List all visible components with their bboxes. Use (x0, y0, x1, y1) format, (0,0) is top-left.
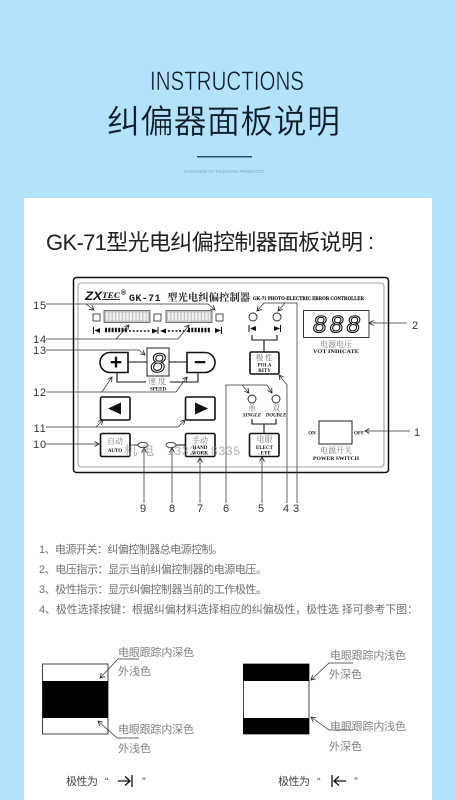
LED indicator squares (93, 314, 223, 321)
eye mode labels: SINGLE (243, 414, 262, 418)
callout numbers: 10 (33, 439, 47, 451)
brand logo: ZXTEC: TEC (102, 290, 120, 300)
power switch label: 电源开关 (320, 445, 352, 455)
speed label: SPEED (150, 388, 166, 392)
brand logo: ZXTEC: ZX (84, 289, 103, 303)
manual button: HAND (193, 446, 208, 451)
callout numbers: 8 (169, 503, 175, 515)
right diagram labels: 外深色 (329, 739, 362, 753)
polarity button: RITY (258, 369, 271, 374)
minus button (187, 351, 215, 374)
watermark: 1332 (167, 444, 196, 458)
panel title English: GK-71 PHOTO-ELECTRIC ERROR CONTROLLER (253, 296, 365, 302)
callout numbers: 6 (223, 503, 229, 515)
polarity direction symbols (248, 325, 281, 332)
eye lamps (248, 395, 280, 403)
LED bar left (104, 310, 150, 322)
eye bracket (252, 419, 276, 433)
deviation meter row (93, 327, 222, 334)
manual button: 手动 (192, 435, 208, 445)
panel frame (74, 278, 388, 472)
power switch label: POWER SWITCH (313, 457, 359, 462)
voltage label: 电源电压 (320, 339, 352, 349)
left diagram labels (118, 645, 194, 755)
power switch (308, 421, 364, 444)
voltage display (304, 310, 369, 338)
title: Chinese heading: 纠偏器面板说明 (107, 103, 340, 140)
callout numbers: 15 (33, 300, 47, 312)
callout numbers: 9 (140, 503, 146, 515)
left polarity caption: 极性为 (66, 774, 98, 788)
manual button: WORK (192, 452, 208, 456)
polarity button: 极性 (256, 352, 274, 362)
polarity button: POLA (258, 364, 272, 368)
eye mode labels: DOUBLE (265, 414, 287, 418)
left diagram labels: 电眼跟踪内深色 (118, 645, 194, 659)
instruction list (39, 542, 418, 616)
left diagram leaders (98, 659, 139, 738)
speed label: 速度 (148, 376, 168, 386)
left polarity caption (66, 774, 146, 788)
watermark: 8335 (211, 444, 240, 458)
polarity button (250, 352, 279, 374)
speed connector lines (117, 362, 198, 382)
voltage label (313, 339, 360, 355)
power switch: OFF (354, 432, 364, 436)
watermark: 机电 (124, 443, 154, 458)
right arrow button (186, 397, 215, 420)
title underline (197, 156, 252, 158)
callout numbers: 5 (258, 503, 264, 515)
plus button: + (110, 351, 122, 374)
speed display: 8 (150, 348, 166, 378)
callout numbers: 3 (293, 503, 299, 515)
electric eye button: . EYE (258, 452, 272, 456)
brand logo: ZXTEC (84, 289, 127, 303)
speed display (147, 348, 169, 378)
callout numbers: 2 (412, 320, 418, 332)
callout numbers: 7 (197, 503, 203, 515)
card heading: GK-71型光电纠偏控制器面板说明 (46, 230, 363, 255)
eye mode labels: 单 (248, 403, 256, 413)
callout numbers: 4 (283, 503, 289, 515)
callout leaders (46, 303, 410, 503)
card heading: : (368, 229, 374, 254)
left diagram labels: 外浅色 (118, 741, 151, 755)
callout numbers: 11 (33, 423, 47, 435)
diagram: dark centre stripe (42, 664, 108, 734)
callout numbers (33, 300, 420, 515)
electric eye button: 电眼 (256, 434, 272, 444)
item 2: 2、电压指示：显示当前纠偏控制器的电源电压。 (39, 562, 267, 576)
right polarity caption: 极性为 (278, 774, 310, 788)
minus button: − (194, 351, 206, 374)
diagram: light centre stripe (243, 664, 309, 734)
power switch: ON (308, 432, 316, 436)
item 3: 3、极性指示：显示纠偏控制器当前的工作极性。 (39, 582, 267, 596)
panel title Chinese: GK-71 型光电纠偏控制器 (129, 289, 250, 305)
callout numbers: 14 (33, 334, 47, 346)
right diagram leaders (311, 663, 353, 730)
plus button (100, 351, 128, 374)
speed label (148, 376, 168, 392)
right polarity caption: ” (354, 776, 358, 788)
callout numbers: 1 (414, 427, 420, 439)
LED bar right (166, 310, 212, 322)
manual button (186, 434, 215, 456)
callout numbers: 13 (33, 345, 47, 357)
eye mode labels: 双 (272, 404, 280, 413)
callout numbers: 12 (33, 387, 47, 399)
electric eye button (250, 434, 279, 456)
item 1: 1、电源开关：纠偏控制器总电源控制。 (39, 542, 223, 556)
right diagram labels (329, 648, 406, 753)
eye mode labels (243, 403, 287, 418)
panel: controller front panel (74, 278, 388, 472)
right diagram labels: 外深色 (329, 667, 362, 681)
auto button: 自动 (107, 436, 123, 446)
right polarity caption: “ (317, 776, 321, 788)
power switch label (313, 445, 359, 462)
left arrow button (100, 397, 130, 420)
right polarity caption (278, 774, 358, 788)
left diagram labels: 电眼跟踪内深色 (118, 722, 194, 736)
voltage display: 888 (313, 312, 361, 338)
item 4: 4、极性选择按键：根据纠偏材料选择相应的纠偏极性，极性选 择可参考下图： (39, 602, 418, 616)
auto button: AUTO (108, 449, 122, 454)
brand logo: ZXTEC: ® (121, 289, 127, 297)
left polarity caption: “ (105, 776, 109, 788)
right diagram labels: 电眼跟踪内浅色 (330, 719, 406, 733)
left polarity caption: ” (142, 776, 146, 788)
right diagram labels: 电眼跟踪内浅色 (330, 648, 406, 662)
electric eye button: ELECT (256, 446, 274, 451)
voltage label: VOT INDICATE (313, 350, 360, 355)
overview caption: OVERVIEW OF PICKETING PRODUCTS (184, 169, 264, 174)
auto indicator (130, 442, 148, 448)
polarity bracket (252, 335, 277, 352)
watermark (124, 443, 240, 458)
left diagram labels: 外浅色 (118, 664, 151, 678)
panel: white content card (24, 198, 432, 800)
polarity lamps (249, 313, 281, 321)
manual indicator (166, 442, 185, 448)
auto button (100, 434, 130, 456)
title: INSTRUCTIONS: INSTRUCTIONS (150, 66, 304, 96)
